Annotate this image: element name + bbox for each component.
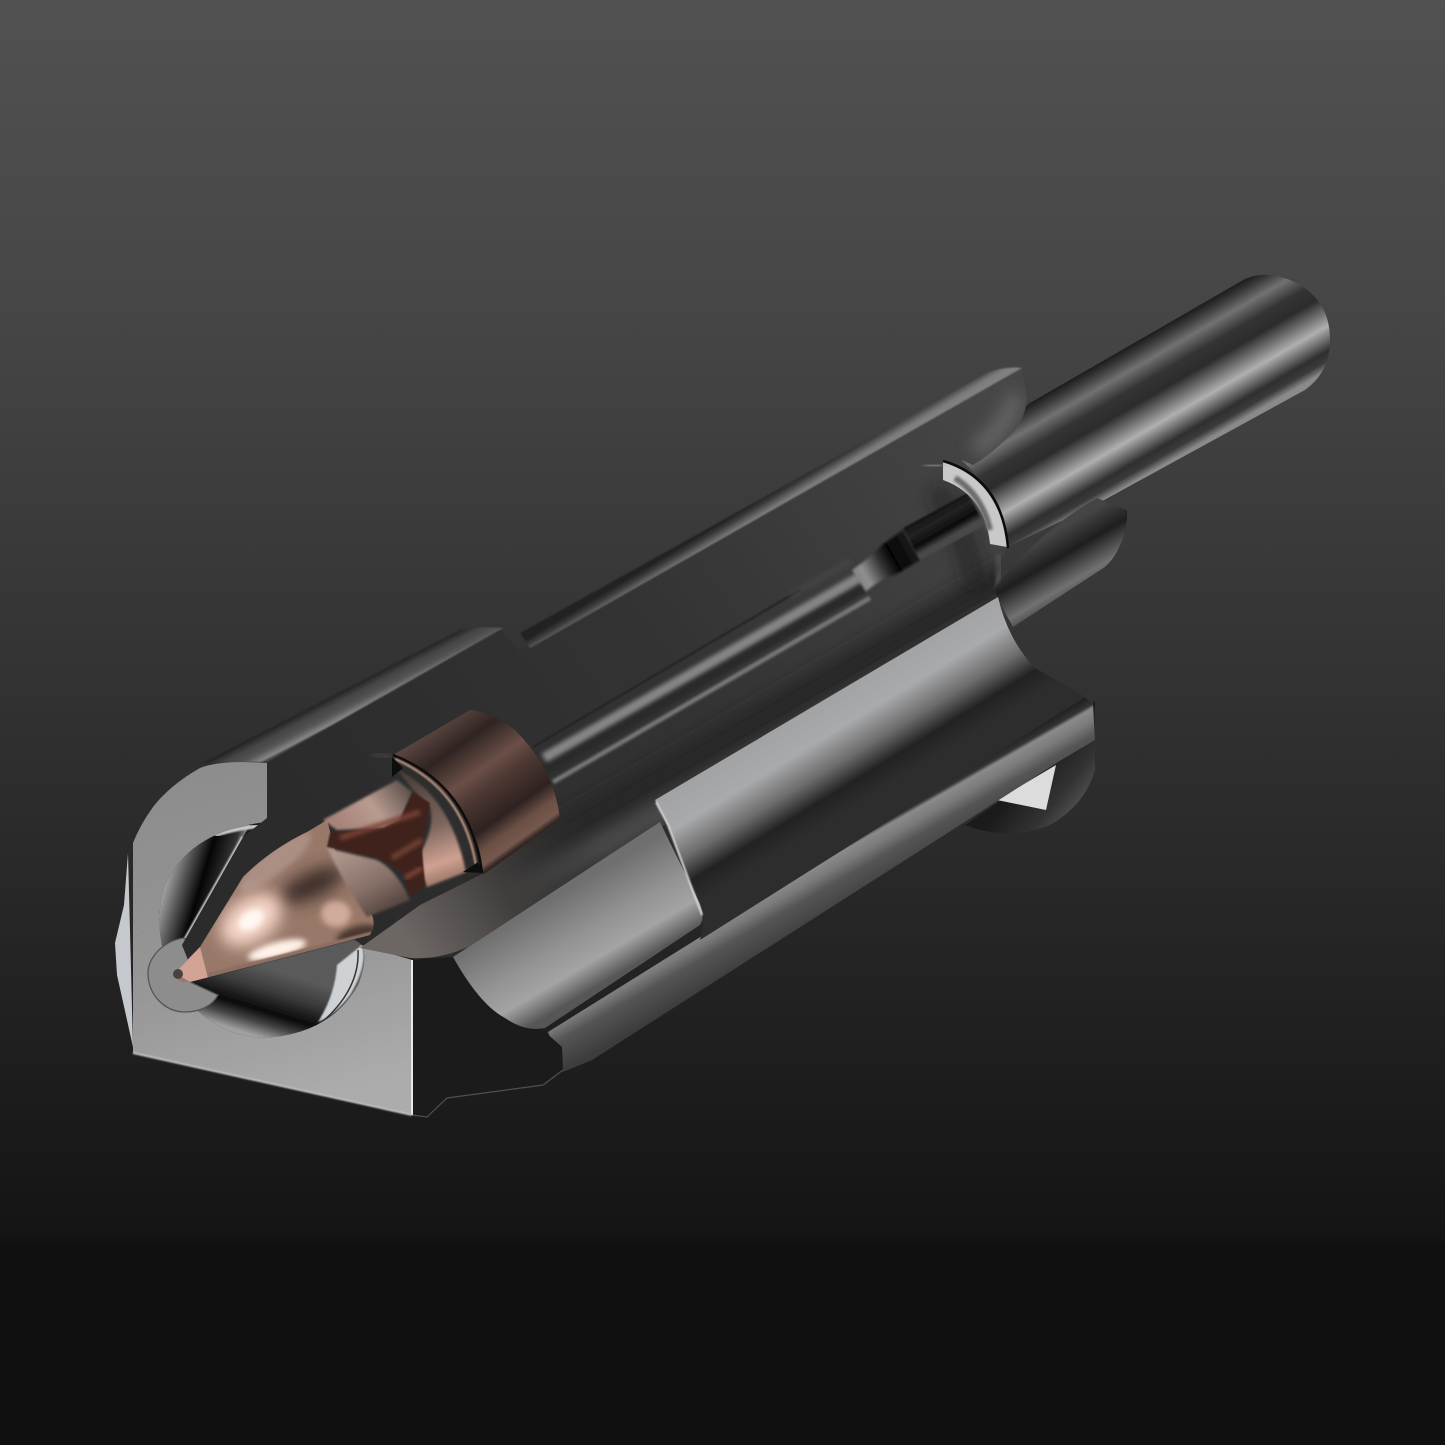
white triangle	[997, 765, 1056, 810]
bullet highlights	[211, 882, 291, 958]
copper collar ring	[372, 710, 560, 875]
tube neck	[852, 530, 920, 592]
crescent	[398, 770, 466, 887]
lower heater plate	[453, 802, 703, 1029]
bore stripe	[182, 837, 243, 945]
bore right rim	[318, 945, 364, 1022]
bullet lower edge	[190, 936, 372, 982]
face right edge	[411, 960, 413, 1115]
light band above plate	[536, 736, 762, 884]
dark side wall	[412, 957, 563, 1117]
upper heater plate	[655, 597, 1085, 940]
lower shell	[993, 498, 1127, 627]
outer rail	[548, 697, 1095, 1072]
wide tube	[903, 493, 985, 560]
feed tube	[533, 493, 985, 782]
face left sliver	[115, 853, 133, 1047]
face bottom edge	[133, 1053, 412, 1115]
flutes	[327, 792, 430, 897]
dark band below tube	[560, 558, 1004, 836]
bore upper rim	[215, 826, 267, 835]
bore lower shading	[198, 940, 364, 1038]
interior dark channel	[532, 385, 1027, 888]
face grain	[133, 762, 411, 1062]
hotend illustration	[0, 0, 1445, 1148]
bullet upper tone	[238, 832, 312, 892]
bullet shadow	[276, 859, 348, 911]
metal rod	[950, 275, 1330, 560]
top left bevel	[203, 627, 503, 763]
copper fluted disc	[323, 757, 482, 917]
bright ring	[925, 461, 1008, 582]
nozzle bore	[160, 823, 364, 1038]
notch triangles	[392, 757, 403, 777]
front face	[115, 750, 420, 1120]
shell highlight	[975, 395, 1015, 450]
tip washer	[148, 938, 218, 1012]
bore upper shading	[160, 825, 250, 946]
hook clip behind rail	[965, 700, 1095, 834]
copper nozzle bullet	[173, 820, 382, 982]
bullet tip	[178, 947, 208, 982]
lower lobe	[327, 848, 410, 917]
petal	[323, 780, 412, 830]
shadow around ring	[935, 490, 975, 585]
copper socket base	[360, 820, 660, 958]
top thin rail	[520, 368, 1022, 648]
dark wedge between bore and nozzle	[182, 800, 320, 965]
